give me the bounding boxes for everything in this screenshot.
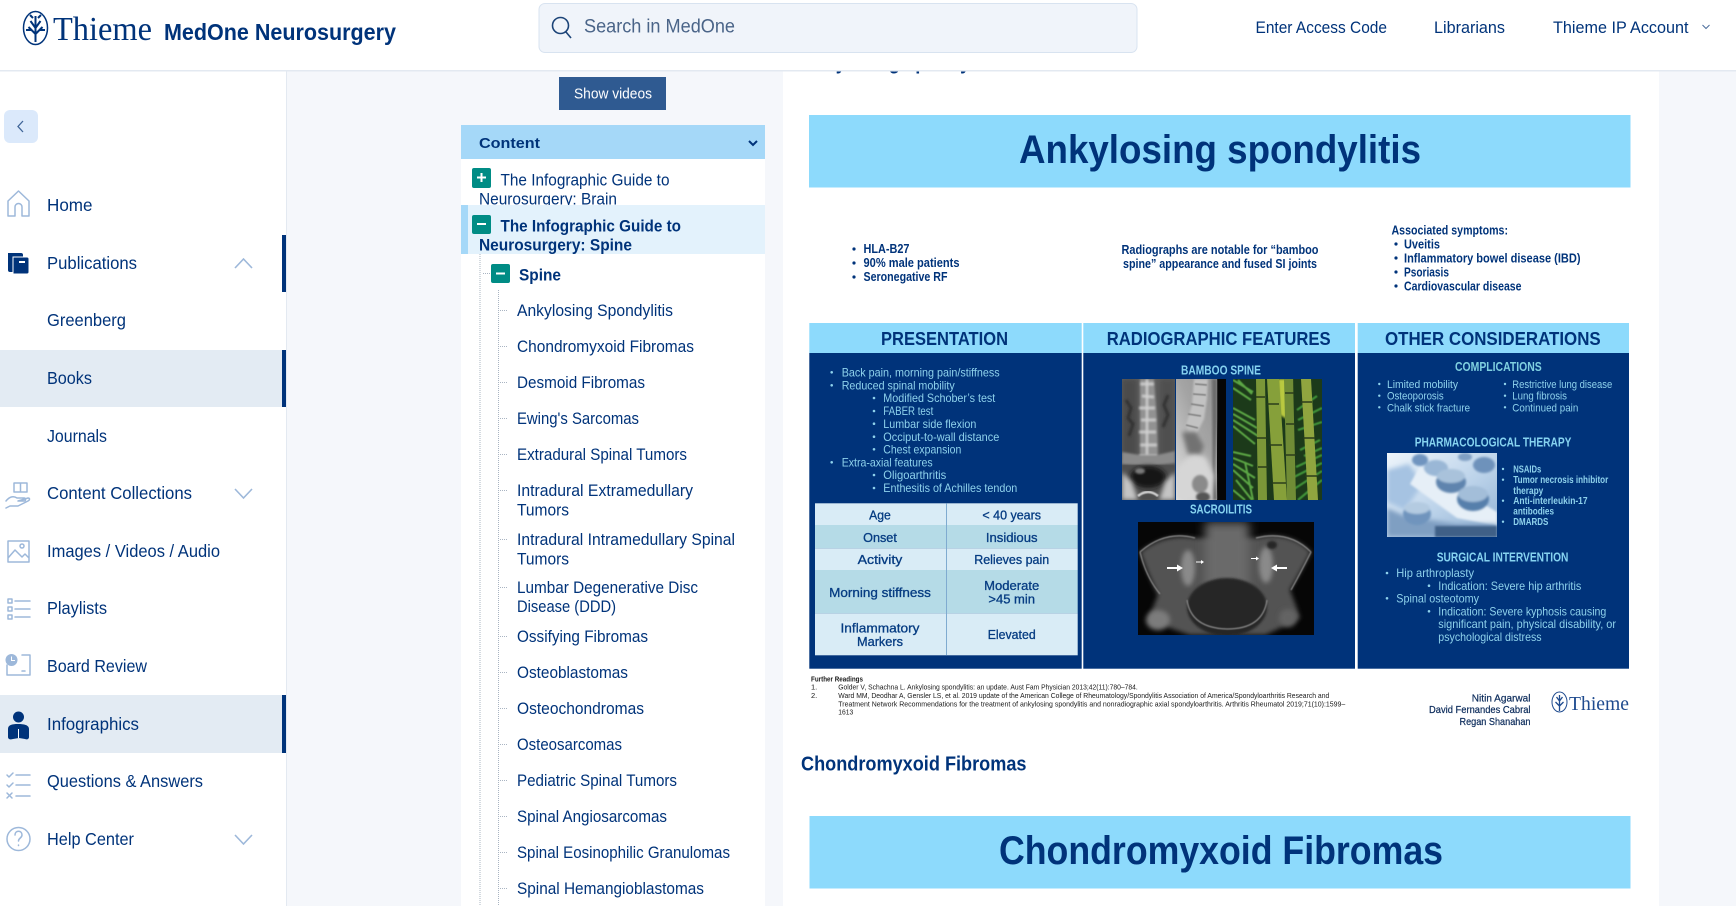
chapter list: Disease (DDD) xyxy=(517,598,616,616)
authors xyxy=(1429,692,1531,728)
chapter list: Intradural Extramedullary xyxy=(517,482,694,500)
presentation table: Insidious xyxy=(986,531,1038,545)
image: pelvis x-ray with arrows xyxy=(1138,522,1314,636)
panel: presentation xyxy=(809,323,1082,669)
nav: Content Collections: Content Collections xyxy=(47,483,192,503)
key facts list xyxy=(852,242,960,284)
further readings: Treatment Network Recommendations for the treatment of ankylosing spondylitis and nonradiographic axial spondyloarthritis. Arthritis Rheumatol 2019;71(10):1599– xyxy=(838,699,1346,708)
logo: Thieme small: Thieme xyxy=(1569,693,1629,715)
chapter list xyxy=(517,302,735,898)
pharmacological therapy: Tumor necrosis inhibitor xyxy=(1513,475,1608,486)
content header bar: Content xyxy=(479,136,540,152)
label: sacroiliitis: SACROILITIS xyxy=(1190,502,1252,516)
nav: Infographics (selected) xyxy=(0,695,286,753)
nav: Home: Home xyxy=(47,195,92,215)
nav: Journals: Journals xyxy=(47,426,107,446)
presentation table: Onset xyxy=(863,531,897,545)
panel: top header xyxy=(0,0,1736,72)
image: lateral spine x-ray xyxy=(1175,379,1226,502)
presentation table: Markers xyxy=(857,635,903,649)
further readings xyxy=(811,674,1346,716)
nav: Images / Videos / Audio: Images / Videos / Audio xyxy=(47,541,220,561)
presentation table: Moderate xyxy=(984,579,1039,593)
panel: content tree xyxy=(461,125,765,906)
title banner: Ankylosing spondylitis xyxy=(1019,128,1421,172)
pharmacological therapy xyxy=(1387,436,1608,537)
chapter list: Osteochondromas xyxy=(517,700,644,718)
chapter list: Tumors xyxy=(517,550,569,568)
chapter list: Chondromyxoid Fibromas xyxy=(517,338,694,356)
authors: Regan Shanahan xyxy=(1460,716,1531,728)
key facts list: Seronegative RF xyxy=(864,270,948,284)
banner: Chondromyxoid Fibromas title: Chondromyxoid Fibromas xyxy=(999,829,1443,873)
authors: David Fernandes Cabral xyxy=(1429,704,1530,716)
label: bamboo spine: BAMBOO SPINE xyxy=(1181,364,1261,378)
chapter list: Extradural Spinal Tumors xyxy=(517,446,687,464)
tree item: Brain book: Neurosurgery: Brain xyxy=(479,190,617,208)
nav: Playlists: Playlists xyxy=(47,598,107,618)
nav: Books (selected) xyxy=(0,350,286,407)
heading: Ankylosing spondylitis clipped by header: Ankylosing spondylitis xyxy=(801,51,1002,74)
link: Thieme IP Account: Thieme IP Account xyxy=(1553,18,1689,37)
presentation bullets: Lumbar side flexion xyxy=(883,417,976,431)
presentation table: Morning stiffness xyxy=(829,586,931,600)
presentation bullets: FABER test xyxy=(883,404,934,418)
nav: Questions & Answers: Questions & Answers xyxy=(47,771,203,791)
nav: Questions & Answers xyxy=(7,771,203,798)
associated symptoms: Psoriasis xyxy=(1404,266,1449,280)
surgical intervention xyxy=(1386,550,1616,644)
presentation bullets: Extra-axial features xyxy=(842,456,933,470)
radiographs note xyxy=(1122,243,1319,271)
associated symptoms: Cardiovascular disease xyxy=(1404,280,1522,294)
link: Librarians: Librarians xyxy=(1434,18,1505,37)
presentation table: Elevated xyxy=(988,628,1036,642)
image: AP spine x-ray xyxy=(1122,379,1175,500)
further readings: 2. xyxy=(811,691,817,700)
nav: Publications (active section): Publications xyxy=(47,253,137,273)
presentation bullets: Reduced spinal mobility xyxy=(842,378,955,392)
nav: Board Review: Board Review xyxy=(47,656,147,676)
content header bar xyxy=(461,125,765,159)
chapter list: Osteosarcomas xyxy=(517,736,622,754)
chapter list: Tumors xyxy=(517,502,569,520)
presentation bullets: Modified Schober’s test xyxy=(883,391,996,405)
heading: Chondromyxoid Fibromas: Chondromyxoid Fibromas xyxy=(801,754,1026,776)
key facts list: 90% male patients xyxy=(864,256,960,270)
nav: Help Center: Help Center xyxy=(47,829,134,849)
associated symptoms: Uveitis xyxy=(1404,238,1440,252)
presentation table: Inflammatory xyxy=(840,622,920,636)
surgical intervention: Hip arthroplasty xyxy=(1396,566,1474,580)
surgical intervention: Indication: Severe hip arthritis xyxy=(1438,579,1581,593)
surgical intervention: SURGICAL INTERVENTION xyxy=(1437,550,1568,564)
presentation table: Age xyxy=(869,508,891,522)
presentation bullets: Oligoarthritis xyxy=(883,468,946,482)
nav: Books (selected): Books xyxy=(47,368,92,388)
complications: Continued pain xyxy=(1512,402,1578,414)
tree item: Spine book (selected): Neurosurgery: Spine xyxy=(479,236,632,254)
nav: Publications (active section) xyxy=(8,235,286,292)
surgical intervention: significant pain, physical disability, or xyxy=(1438,617,1616,631)
chapter list: Ossifying Fibromas xyxy=(517,628,648,646)
banner: Chondromyxoid Fibromas title xyxy=(810,816,1630,888)
tree item: Spine book (selected) xyxy=(461,205,765,254)
heading: radiographic features: RADIOGRAPHIC FEATURES xyxy=(1107,329,1331,349)
panel: radiographic features xyxy=(1083,323,1355,669)
surgical intervention: psychological distress xyxy=(1438,630,1542,644)
tree item: Brain book: The Infographic Guide to xyxy=(500,172,670,190)
nav: Home xyxy=(8,191,92,216)
radiographs note: spine” appearance and fused SI joints xyxy=(1123,257,1317,271)
nav: Infographics (selected): Infographics xyxy=(47,714,139,734)
chapter list: Ankylosing Spondylitis xyxy=(517,302,673,320)
panel: other considerations xyxy=(1358,323,1629,669)
presentation table: >45 min xyxy=(988,592,1035,606)
complications: Limited mobility xyxy=(1387,379,1458,391)
tree item: Brain book xyxy=(472,168,670,208)
pharmacological therapy: antibodies xyxy=(1513,506,1554,518)
heading: other considerations: OTHER CONSIDERATIONS xyxy=(1385,329,1601,349)
presentation table: Relieves pain xyxy=(974,553,1049,567)
radiographs note: Radiographs are notable for “bamboo xyxy=(1122,243,1319,257)
pharmacological therapy: PHARMACOLOGICAL THERAPY xyxy=(1415,436,1572,450)
presentation table xyxy=(815,503,1078,655)
title banner xyxy=(809,115,1630,188)
associated symptoms xyxy=(1392,224,1580,294)
nav: Content Collections xyxy=(6,483,252,508)
chapter list: Intradural Intramedullary Spinal xyxy=(517,531,735,549)
presentation bullets: Enthesitis of Achilles tendon xyxy=(883,481,1017,495)
chapter list: Osteoblastomas xyxy=(517,664,628,682)
complications: Lung fibrosis xyxy=(1512,391,1567,403)
tree item: Spine chapter: Spine xyxy=(519,266,561,284)
complications: Restrictive lung disease xyxy=(1512,379,1612,391)
chapter list: Pediatric Spinal Tumors xyxy=(517,772,677,790)
logo: Thieme tree: Thieme xyxy=(53,11,152,48)
further readings: Ward MM, Deodhar A, Gensler LS, et al. 2019 update of the American College of Rheumatology/Spondylitis Association of America/Spondyloarthritis Research and xyxy=(838,691,1329,700)
pharmacological therapy: NSAIDs xyxy=(1513,464,1542,476)
infographic: Ankylosing spondylitis xyxy=(809,115,1630,728)
complications: COMPLICATIONS xyxy=(1455,360,1542,374)
complications: Osteoporosis xyxy=(1387,391,1444,403)
image: blister pack pills xyxy=(1387,453,1497,537)
button: Show videos xyxy=(559,77,666,110)
pharmacological therapy: Anti-interleukin-17 xyxy=(1513,496,1588,507)
authors: Nitin Agarwal xyxy=(1472,692,1530,704)
further readings: Golder V, Schachna L. Ankylosing spondylitis: an update. Aust Fam Physician 2013;42(11):780–784. xyxy=(838,683,1138,692)
chapter list: Lumbar Degenerative Disc xyxy=(517,579,698,597)
heading: presentation: PRESENTATION xyxy=(881,329,1008,349)
site name: MedOne Neurosurgery xyxy=(164,19,396,45)
tree item: Spine chapter xyxy=(491,264,561,284)
presentation bullets: Chest expansion xyxy=(883,442,961,456)
associated symptoms: Inflammatory bowel disease (IBD) xyxy=(1404,252,1580,266)
presentation table: Activity xyxy=(858,553,903,567)
chapter list: Ewing's Sarcomas xyxy=(517,410,639,428)
presentation bullets: Occiput-to-wall distance xyxy=(883,430,1000,444)
presentation table: < 40 years xyxy=(982,508,1041,522)
surgical intervention: Spinal osteotomy xyxy=(1396,592,1479,606)
button: Show videos: Show videos xyxy=(574,86,652,102)
nav: Help Center xyxy=(7,828,252,850)
chapter list: Spinal Angiosarcomas xyxy=(517,808,667,826)
nav: Playlists xyxy=(8,598,107,619)
chapter list: Spinal Hemangioblastomas xyxy=(517,880,704,898)
nav: Greenberg: Greenberg xyxy=(47,310,126,330)
complications: Chalk stick fracture xyxy=(1387,402,1470,414)
button: collapse sidebar xyxy=(4,110,38,143)
image: bamboo xyxy=(1233,379,1322,500)
search box: Search in MedOne xyxy=(584,16,735,38)
surgical intervention: Indication: Severe kyphosis causing xyxy=(1438,604,1606,618)
pharmacological therapy: therapy xyxy=(1513,486,1544,497)
key facts list: HLA-B27 xyxy=(864,242,910,256)
further readings: 1613 xyxy=(838,707,853,716)
presentation bullets: Back pain, morning pain/stiffness xyxy=(842,366,1000,380)
further readings: 1. xyxy=(811,683,817,692)
associated symptoms: Associated symptoms: xyxy=(1392,224,1508,238)
link: Enter Access Code: Enter Access Code xyxy=(1256,18,1387,37)
chapter list: Spinal Eosinophilic Granulomas xyxy=(517,844,730,862)
complications xyxy=(1378,360,1612,414)
panel: sidebar xyxy=(0,71,287,906)
presentation bullets xyxy=(830,366,1017,495)
search box xyxy=(539,4,1137,52)
pharmacological therapy: DMARDS xyxy=(1513,517,1549,528)
nav: Board Review xyxy=(6,654,147,676)
tree item: Spine book (selected): The Infographic Guide to xyxy=(500,218,681,236)
further readings: Further Readings xyxy=(811,674,863,684)
chapter list: Desmoid Fibromas xyxy=(517,374,645,392)
